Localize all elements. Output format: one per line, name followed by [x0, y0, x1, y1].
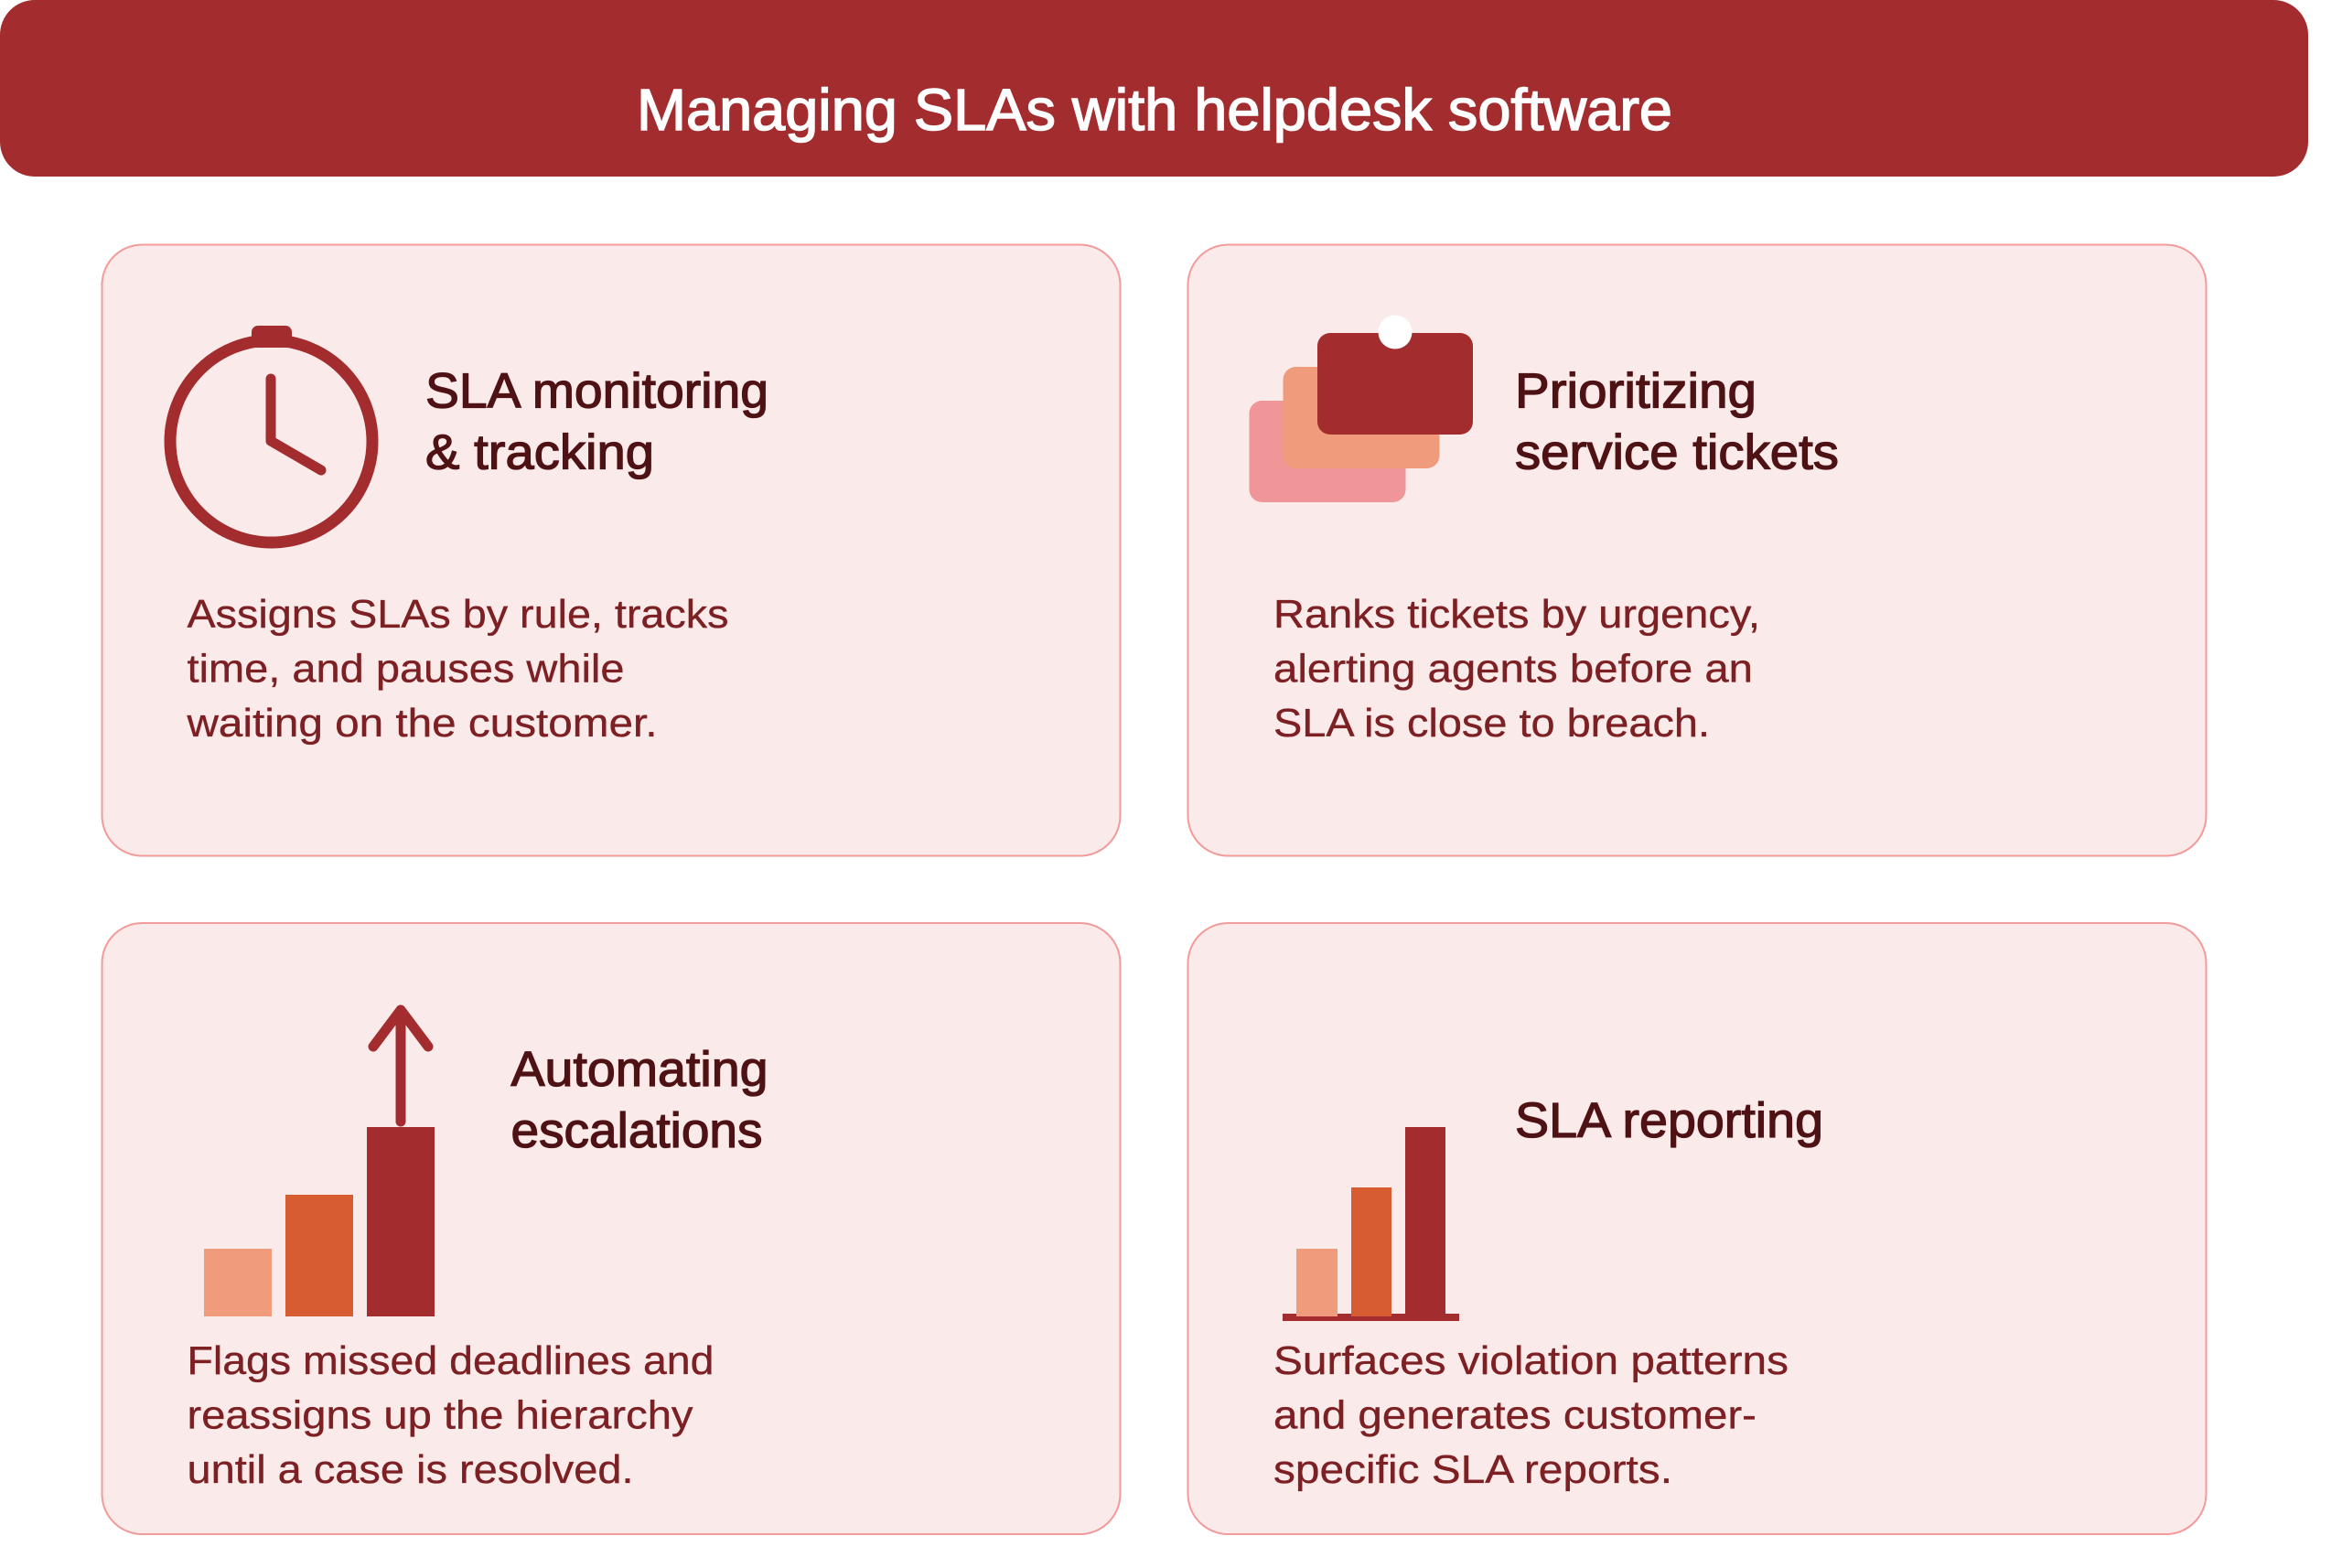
- heading: Prioritizing: [1515, 364, 1756, 419]
- description: and generates customer-: [1273, 1392, 1756, 1438]
- heading: escalations: [510, 1103, 763, 1158]
- heading: & tracking: [425, 424, 654, 479]
- description: Flags missed deadlines and: [187, 1338, 714, 1383]
- title: Managing SLAs with helpdesk software: [637, 77, 1672, 143]
- description: specific SLA reports.: [1273, 1447, 1672, 1492]
- description: waiting on the customer.: [186, 701, 657, 746]
- description: [1273, 1338, 1789, 1492]
- description: time, and pauses while: [187, 646, 624, 692]
- description: alerting agents before an: [1273, 646, 1753, 692]
- description: Surfaces violation patterns: [1273, 1338, 1789, 1383]
- heading: service tickets: [1515, 424, 1839, 479]
- heading: [1515, 364, 1839, 479]
- panel: Prioritizing service tickets: [1187, 245, 2207, 856]
- icon: bar chart: [1283, 1127, 1459, 1321]
- heading: Automating: [510, 1042, 768, 1097]
- icon: stacked tickets: [1250, 315, 1473, 502]
- description: Assigns SLAs by rule, tracks: [187, 592, 728, 637]
- title banner: [0, 0, 2308, 177]
- panel: SLA reporting: [1187, 923, 2207, 1534]
- panel: Automating escalations: [102, 923, 1120, 1534]
- heading: [425, 364, 768, 479]
- description: reassigns up the hierarchy: [187, 1392, 693, 1438]
- panel: SLA monitoring & tracking: [102, 245, 1120, 856]
- description: SLA is close to breach.: [1273, 701, 1710, 746]
- description: [1273, 592, 1760, 746]
- icon: rising bars with arrow: [204, 1010, 435, 1316]
- description: [186, 592, 728, 746]
- description: [187, 1338, 714, 1492]
- heading: [510, 1042, 768, 1158]
- heading: SLA monitoring: [425, 364, 768, 419]
- icon: stopwatch clock: [170, 326, 372, 542]
- heading: SLA reporting: [1515, 1093, 1823, 1148]
- description: until a case is resolved.: [187, 1447, 633, 1492]
- description: Ranks tickets by urgency,: [1273, 592, 1760, 637]
